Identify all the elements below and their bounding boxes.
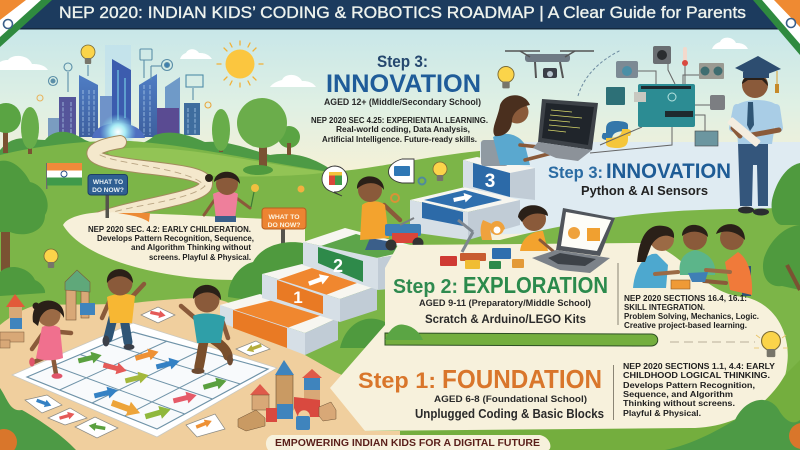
section: step 1 foundation: AGED 6-8 (Foundational School) bbox=[434, 394, 587, 404]
divider bbox=[617, 263, 619, 325]
left foreground tree bbox=[0, 161, 48, 296]
tech icons above the city bbox=[37, 49, 211, 108]
trees in the back bbox=[0, 98, 300, 175]
laptop with scratch bbox=[532, 208, 615, 273]
section: step 1 foundation: Unplugged Coding & Basic Blocks bbox=[415, 407, 604, 421]
stair: step 1 bbox=[262, 264, 377, 322]
text: early childhood callout: screens. Playful & Physical. bbox=[149, 253, 251, 262]
stair: step above bbox=[410, 187, 520, 240]
foreground foliage right bbox=[665, 400, 800, 450]
bottom banner: EMPOWERING INDIAN KIDS FOR A DIGITAL FUTURE bbox=[275, 438, 540, 449]
section: step 2 exploration: Scratch & Arduino/LEGO Kits bbox=[425, 312, 586, 326]
india flag on pole bbox=[46, 163, 82, 189]
text: step 2 policy note: SKILL INTEGRATION. bbox=[624, 303, 705, 312]
text: step 1 policy note: NEP 2020 SECTIONS 1.1, 4.4: EARLY bbox=[623, 362, 776, 371]
flag: top right corner bbox=[753, 0, 800, 55]
boy in yellow shirt bbox=[102, 269, 144, 350]
lightbulb on panel bbox=[754, 332, 788, 357]
girl in pink dress bbox=[29, 301, 71, 379]
text: early childhood callout: and Algorithm Thinking without bbox=[131, 243, 251, 252]
text: step 1 policy note: Develops Pattern Recognition, bbox=[623, 381, 755, 390]
text: step 2 policy note bbox=[624, 294, 759, 330]
back hedges bbox=[0, 132, 335, 190]
section: step 3 innovation heading: AGED 12+ (Middle/Secondary School) bbox=[324, 97, 481, 108]
clouds bbox=[0, 38, 748, 87]
stair: step base bbox=[220, 294, 338, 355]
bush beside step 1 panel bbox=[340, 319, 392, 348]
winding road bbox=[90, 142, 206, 222]
staircase bbox=[220, 157, 535, 355]
section: step 1 foundation: Step 1: bbox=[358, 368, 436, 393]
section: step 1 foundation: FOUNDATION bbox=[442, 364, 602, 394]
bottom green ground bbox=[360, 360, 800, 450]
robot car bbox=[385, 218, 424, 250]
text: early childhood callout: Develops Pattern Recognition, Sequence, bbox=[97, 234, 254, 243]
section: step 3 innovation heading: NEP 2020 SEC 4.25: EXPERIENTIAL LEARNING. bbox=[311, 116, 488, 125]
girl at laptop step 2 bbox=[518, 205, 553, 251]
speech bubble: lego bbox=[388, 159, 414, 183]
lego bricks bbox=[440, 248, 524, 269]
arduino board and sensors bbox=[590, 46, 725, 153]
section: step 2 exploration: Step 2: bbox=[393, 276, 458, 298]
arrow cards bbox=[25, 307, 270, 438]
step 3 sensors label bbox=[548, 160, 731, 198]
sign: what to do now blue: WHAT TO bbox=[93, 179, 123, 186]
green divider band bbox=[385, 324, 658, 346]
stair: step 1: 1 bbox=[293, 288, 303, 307]
toy blocks top left bbox=[0, 270, 95, 348]
text: step 1 policy note: CHILDHOOD LOGICAL THINKING. bbox=[623, 371, 770, 380]
mat arrows bbox=[77, 346, 228, 423]
sign: what to do now orange bbox=[262, 208, 306, 254]
girl at laptop step 3 bbox=[481, 95, 558, 166]
text: step 2 policy note: Problem Solving, Mechanics, Logic. bbox=[624, 312, 759, 321]
kids building together bbox=[633, 224, 752, 296]
flower and gear on lawn bbox=[391, 194, 399, 202]
python logo bbox=[602, 121, 631, 148]
title: NEP 2020: INDIAN KIDS’ CODING & ROBOTICS ROADMAP | A Clear Guide for Parents bbox=[59, 4, 746, 22]
wifi and flight path bbox=[578, 50, 621, 96]
background sky bbox=[0, 0, 800, 175]
graduate boy bbox=[727, 56, 781, 216]
stair: step 2: 2 bbox=[333, 256, 343, 276]
step 3 sensors label: INNOVATION bbox=[606, 160, 731, 183]
divider bbox=[612, 365, 614, 420]
stair: step 3 bbox=[463, 157, 535, 200]
section: step 3 innovation heading bbox=[311, 52, 488, 144]
section: step 3 innovation heading: Real-world coding, Data Analysis, bbox=[336, 125, 470, 134]
speech bubble: cube bbox=[322, 166, 348, 196]
gear near stairs bbox=[418, 178, 426, 184]
green hills bbox=[0, 141, 800, 385]
section: step 3 innovation heading: Step 3: bbox=[377, 52, 428, 71]
sand play area bbox=[0, 298, 400, 450]
text: step 1 policy note bbox=[623, 362, 776, 418]
section: step 1 foundation bbox=[358, 364, 604, 421]
mandala corner right bbox=[789, 423, 800, 449]
big cream panel for steps 1 and 2 bbox=[330, 243, 788, 431]
lightbulb near step 3 bbox=[498, 66, 514, 88]
sign: what to do now blue: DO NOW? bbox=[92, 187, 124, 194]
lightbulb on grass bbox=[44, 249, 58, 268]
right side tree bbox=[763, 163, 800, 290]
dashed route line bbox=[670, 341, 755, 343]
text: step 1 policy note: Sequence, and Algorithm bbox=[623, 390, 733, 399]
toy blocks bottom right bbox=[238, 360, 336, 431]
section: step 3 innovation heading: Artificial Intelligence. Future-ready skills. bbox=[322, 135, 477, 144]
bottom banner bbox=[266, 435, 550, 450]
stair: step 3: 3 bbox=[485, 171, 495, 192]
section: step 2 exploration: AGED 9-11 (Preparatory/Middle School) bbox=[419, 298, 591, 308]
laptop step 3 bbox=[533, 99, 598, 161]
girl with flower on path bbox=[204, 172, 304, 222]
callout panel: early childhood bbox=[63, 212, 305, 285]
text: step 1 policy note: Thinking without screens. bbox=[623, 399, 735, 408]
text: early childhood callout bbox=[88, 225, 254, 262]
sign: what to do now orange: WHAT TO bbox=[268, 214, 300, 221]
text: step 1 policy note: Playful & Physical. bbox=[623, 409, 701, 418]
boy on stairs building robot car bbox=[357, 176, 424, 250]
text: early childhood callout: NEP 2020 SEC. 4.2: EARLY CHILDERATION. bbox=[88, 225, 251, 234]
text: step 2 policy note: Creative project-based learning. bbox=[624, 321, 747, 330]
pale blue sensor panel bbox=[480, 142, 800, 235]
section: step 2 exploration: EXPLORATION bbox=[463, 272, 608, 298]
boy in teal shirt bbox=[181, 285, 233, 374]
lightbulb by stairs bbox=[433, 162, 447, 181]
right hill bbox=[500, 205, 800, 385]
step 3 sensors label: Python & AI Sensors bbox=[581, 183, 708, 198]
icon: sun bbox=[217, 41, 263, 87]
foreground foliage left bbox=[0, 388, 76, 450]
mandala corner left bbox=[0, 429, 17, 450]
sign: what to do now blue bbox=[88, 174, 128, 218]
scratch cat and robot arm bbox=[458, 220, 505, 252]
header bar bbox=[0, 0, 800, 30]
icon: lightbulb over city bbox=[81, 45, 95, 64]
road accent bbox=[118, 213, 150, 222]
section: step 3 innovation heading: INNOVATION bbox=[326, 70, 481, 98]
text: step 2 policy note: NEP 2020 SECTIONS 16.4, 16.1: bbox=[624, 294, 747, 303]
city skyline bbox=[48, 45, 200, 150]
flag: top left corner bbox=[0, 0, 52, 47]
stair: step 2 bbox=[303, 228, 430, 290]
section: step 2 exploration bbox=[393, 272, 608, 326]
sign: what to do now orange: DO NOW? bbox=[268, 222, 300, 229]
hedge near stairs bbox=[228, 242, 303, 302]
coding floor mat bbox=[12, 323, 277, 437]
step 3 sensors label: Step 3: bbox=[548, 163, 603, 182]
drone bbox=[505, 51, 594, 78]
